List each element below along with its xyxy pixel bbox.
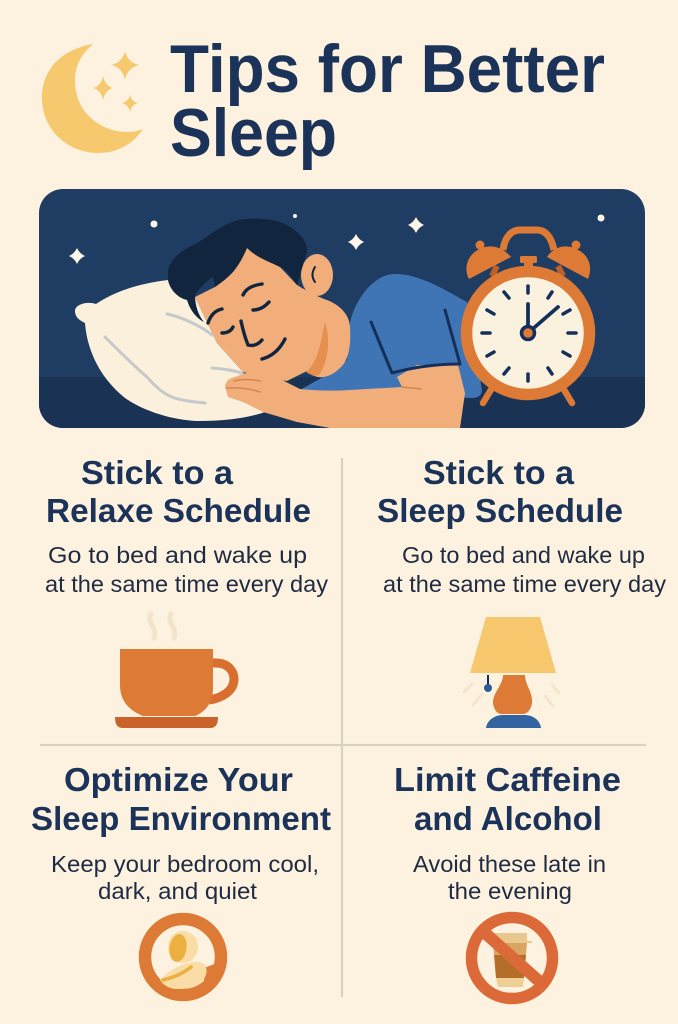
description: Keep your bedroom cool, <box>51 851 319 877</box>
tip: sleep schedule <box>377 454 667 728</box>
arm and hand <box>225 365 465 428</box>
description: at the same time every day <box>383 571 667 597</box>
face features: closed eyes, nose, smile <box>208 284 285 359</box>
clock handle <box>503 230 554 250</box>
heading <box>377 454 623 529</box>
description: the evening <box>448 878 572 904</box>
heading: Stick to a <box>423 454 575 491</box>
ear <box>301 254 333 296</box>
clock feet <box>483 388 572 403</box>
hair <box>168 219 307 322</box>
description <box>51 851 319 904</box>
heading: Optimize Your <box>64 761 293 798</box>
alarm clock <box>466 230 590 403</box>
heading: and Alcohol <box>414 800 602 837</box>
pillow <box>75 280 265 421</box>
tip: relax schedule <box>45 454 329 728</box>
description: dark, and quiet <box>98 878 258 904</box>
heading <box>31 761 331 837</box>
heading <box>46 454 311 529</box>
description: Go to bed and wake up <box>48 542 307 568</box>
title <box>170 31 605 171</box>
icon: circular badge with earplugs <box>145 919 221 995</box>
tip: limit caffeine and alcohol <box>394 761 621 998</box>
heading: Sleep Schedule <box>377 492 623 529</box>
title: Tips for Better <box>170 31 605 107</box>
clock ticks <box>482 286 576 381</box>
neck shadow <box>306 322 328 376</box>
icon: bedside lamp <box>464 617 559 728</box>
face <box>195 248 350 381</box>
shirt <box>300 274 482 398</box>
heading: Relaxe Schedule <box>46 492 311 529</box>
icon: no coffee sign <box>472 918 552 998</box>
heading: Limit Caffeine <box>394 761 621 798</box>
clock bell connectors <box>492 266 563 276</box>
description <box>383 542 667 597</box>
sleeve lines <box>371 310 460 373</box>
description <box>45 542 329 597</box>
dividers <box>40 458 646 997</box>
heading <box>394 761 621 837</box>
icon: crescent moon and stars <box>42 44 143 153</box>
clock bells <box>466 240 590 279</box>
heading: Stick to a <box>81 454 234 491</box>
title: Sleep <box>170 95 337 171</box>
description: Avoid these late in <box>413 851 606 877</box>
description: Go to bed and wake up <box>402 542 645 568</box>
clock face <box>466 272 590 394</box>
panel: sleeping man banner <box>39 189 645 428</box>
icon: coffee cup <box>115 614 234 728</box>
heading: Sleep Environment <box>31 800 331 837</box>
description <box>413 851 606 904</box>
stars in night sky <box>69 214 604 264</box>
tip: optimize sleep environment <box>31 761 331 995</box>
clock hands <box>522 304 558 340</box>
description: at the same time every day <box>45 571 329 597</box>
